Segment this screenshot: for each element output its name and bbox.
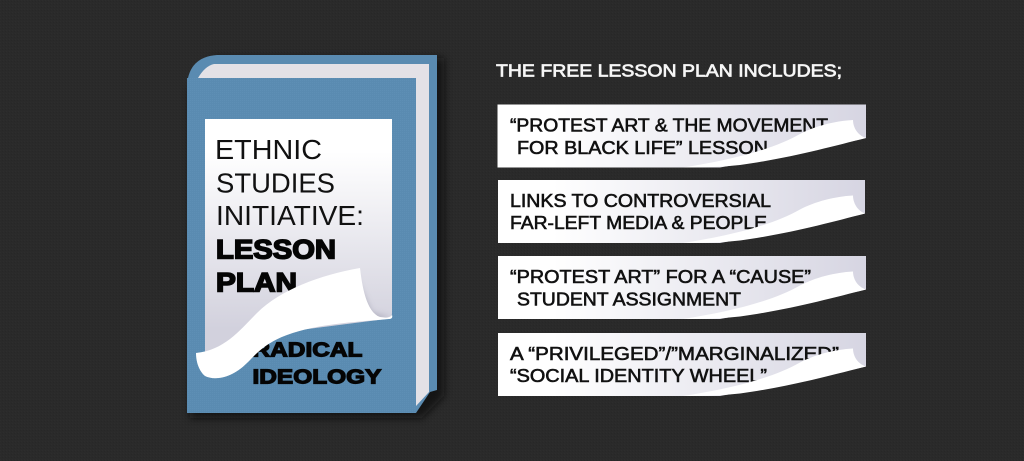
banner text (510, 343, 839, 386)
banner 1 (498, 104, 866, 168)
book (187, 55, 444, 418)
banner 3 (498, 256, 866, 319)
banner text: “PROTEST ART” FOR A “CAUSE” (510, 266, 811, 287)
banner text (510, 266, 811, 310)
banner text (510, 115, 828, 158)
back cover (187, 55, 437, 413)
label title: ETHNIC (215, 134, 322, 165)
heading: THE FREE LESSON PLAN INCLUDES; (496, 60, 842, 80)
front cover (187, 78, 416, 413)
banner text (510, 190, 771, 233)
label title (215, 134, 364, 298)
radical ideology text (252, 338, 382, 388)
banner 4 (498, 333, 866, 396)
cover label (196, 119, 392, 388)
radical ideology text: RADICAL (252, 338, 362, 362)
banner sheet (498, 333, 866, 396)
book shadow (190, 58, 444, 418)
banner sheet (498, 180, 865, 243)
banner text: “SOCIAL IDENTITY WHEEL” (510, 365, 767, 386)
banner sheet (498, 104, 866, 168)
banner sheet (498, 256, 866, 319)
banner text: FOR BLACK LIFE” LESSON (517, 137, 768, 158)
label title: STUDIES (216, 168, 335, 198)
curl shade (364, 289, 388, 318)
banner curl (683, 196, 865, 243)
banner text: LINKS TO CONTROVERSIAL (510, 190, 771, 211)
label sheet (205, 119, 392, 352)
banner text: FAR-LEFT MEDIA & PEOPLE (510, 212, 767, 233)
banner text: A “PRIVILEGED”/”MARGINALIZED” (510, 343, 839, 364)
label title: LESSON (216, 234, 336, 264)
banner 2 (498, 180, 865, 243)
banner text: STUDENT ASSIGNMENT (517, 288, 741, 310)
banner curl (683, 348, 866, 396)
page curl (196, 268, 392, 378)
banner text: “PROTEST ART & THE MOVEMENT (510, 115, 828, 136)
book pages (198, 64, 429, 406)
banner curl (683, 120, 866, 168)
banner curl (683, 272, 866, 319)
label title: INITIATIVE: (216, 200, 364, 231)
radical ideology text: IDEOLOGY (252, 366, 382, 388)
label title: PLAN (216, 268, 297, 298)
